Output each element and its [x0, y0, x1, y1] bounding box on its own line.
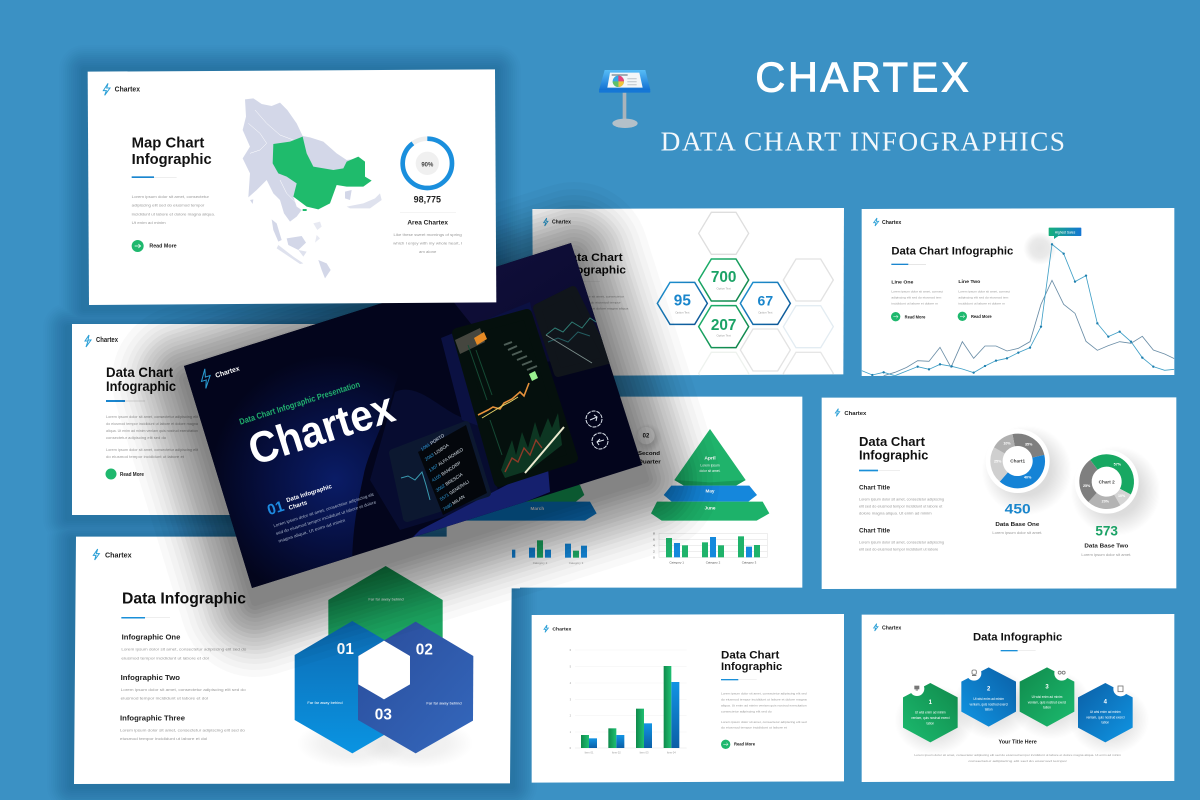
text: infographic one: Lorem ipsum dolor sit amet, consectetur adipiscing elit sed do — [121, 647, 247, 652]
hexagon 2: 2 — [987, 686, 991, 692]
logo: four hexagon slide — [874, 624, 901, 631]
hexagon 4: 4 — [1104, 699, 1108, 705]
body text: consectetur adipiscing elit sed do eiusmod tempor — [968, 759, 1067, 763]
stat: data base one — [992, 501, 1042, 535]
read more button: Read More — [149, 244, 177, 250]
logo: hexagon venn slide: Chartex — [105, 552, 132, 559]
hexagon: navy 02 — [358, 622, 473, 753]
heading: data chart infographic: Infographic — [721, 661, 782, 673]
labels: hexagon numbers and captions: Far far away behind — [426, 701, 462, 706]
text: infographic two: Infographic Two — [121, 673, 181, 682]
logo: left slide — [85, 335, 118, 347]
bar chart: 0 — [570, 746, 572, 750]
heading: data chart infographic — [106, 364, 176, 394]
slide: tilted dark cover — [170, 240, 642, 600]
hexagon: 95 — [657, 282, 707, 324]
body text: Lorem ipsum dolor sit amet, consectetur — [562, 294, 624, 298]
donut chart 1: 35% — [1025, 442, 1033, 446]
heading underline — [859, 470, 900, 471]
heading underline — [721, 679, 757, 680]
stat: data base two: Data Base Two — [1084, 543, 1129, 549]
hexagon 1: veniam, quis nostrud exerci — [911, 716, 950, 720]
icon: keynote — [599, 70, 650, 128]
hexagon 3 — [1011, 666, 1091, 739]
donut chart: 90%: 90% — [421, 162, 434, 168]
left bar chart: Category 3 — [569, 561, 584, 565]
text: infographic two: Lorem ipsum dolor sit amet, consectetur adipiscing elit sed do — [121, 687, 247, 692]
heading: data chart infographic: Data Chart — [721, 650, 780, 662]
button: next arrow — [586, 411, 602, 427]
button: previous arrow — [592, 433, 608, 449]
heading underline — [891, 264, 926, 265]
labels: hexagon numbers and captions: Far far away behind — [307, 700, 343, 705]
hexagon 4 — [1069, 682, 1149, 755]
label: second quarter: 02 — [643, 434, 650, 440]
column: line one — [891, 279, 943, 321]
right bar chart: 2 — [653, 550, 655, 554]
hexagon 1: Ut wisi enim ad minim — [915, 711, 946, 715]
stat: data base one: Data Base One — [995, 522, 1039, 528]
photo: bottom left phone: 4105 BANCORP — [431, 460, 462, 483]
right pyramid — [651, 429, 769, 521]
body text: do eiusmod tempor incididunt ut labore et — [106, 454, 185, 459]
right bar chart: 4 — [653, 544, 655, 548]
hexagon 3: 3 — [1045, 684, 1049, 690]
text: chart title one: dolore magna aliqua. Ut enim ad minim — [859, 511, 932, 515]
dark slide cast shadow — [187, 257, 645, 602]
photo: bottom left phone — [393, 425, 487, 518]
bar chart: Item 03 — [640, 751, 649, 755]
area chartex text block: am alone — [419, 250, 436, 254]
logo: hexagon slide — [544, 218, 571, 226]
slide: four hexagons — [862, 614, 1174, 782]
labels: hexagon numbers and captions: Far far away behind — [368, 597, 404, 602]
cover text — [200, 366, 397, 542]
right bar chart: 0 — [653, 556, 655, 560]
heading: map chart infographic — [132, 134, 212, 168]
read more button — [106, 468, 144, 480]
body text: aliqua. Ut enim ad minim veniam quis nostrud exercitation — [721, 703, 807, 707]
heading: map chart infographic: Infographic — [132, 151, 212, 168]
column: line one: adipiscing elit sed do eiusmod tem — [891, 297, 941, 300]
label: second quarter: Second — [638, 451, 661, 457]
slide: bar chart — [532, 614, 844, 783]
text: infographic three: eiusmod tempor incididunt ut labore et dol — [120, 736, 207, 741]
donut chart 1: 40% — [1024, 476, 1032, 480]
column: line one: incididunt ut labore et dolore m — [891, 303, 938, 306]
right bar chart — [653, 532, 767, 564]
photo: top right phone — [537, 290, 608, 373]
heading: data chart infographic: Infographic — [562, 264, 626, 276]
column: line one: Read More — [905, 314, 926, 319]
hexagon 1 — [894, 681, 974, 755]
bar chart: Item 01 — [585, 751, 594, 755]
text: chart title two — [859, 529, 944, 552]
text: chart title one — [859, 485, 944, 515]
read more button — [132, 240, 177, 252]
stat: data base two: Lorem ipsum dolor sit amet. — [1081, 553, 1131, 557]
logo: bar chart slide: Chartex — [552, 627, 572, 633]
logo: donut slide: Chartex — [844, 411, 867, 417]
text: infographic one — [121, 633, 247, 660]
logo: map slide — [103, 83, 140, 95]
hexagon 3: tation — [1043, 706, 1051, 710]
body text — [106, 414, 199, 459]
donut chart 2 — [1071, 446, 1161, 536]
donut chart: 90% — [403, 139, 452, 188]
hexagon: 67: Option Text — [758, 310, 773, 314]
labels: hexagon numbers and captions: 02 — [416, 641, 433, 658]
area chartex text block: Area Chartex — [407, 221, 449, 227]
hexagon 3: Ut wisi enim ad minim — [1032, 695, 1063, 699]
heading: data chart infographic: Infographic — [859, 449, 928, 463]
hexagon: 207 — [699, 306, 749, 348]
line chart — [862, 232, 1174, 376]
hexagon: 207: Option Text — [717, 333, 731, 337]
donut chart 1: 10% — [1003, 442, 1011, 446]
bar chart: 6 — [570, 648, 572, 652]
donut chart 2: 20% — [1102, 499, 1110, 503]
header: title block — [599, 55, 1065, 157]
left bar chart — [512, 540, 587, 565]
right bar chart: Category 3 — [742, 560, 757, 564]
text: infographic two: eiusmod tempor incididunt ut labore et dol — [121, 696, 208, 701]
hexagon diagram — [295, 566, 473, 768]
slide shadows on background — [68, 70, 512, 786]
column: line two: Read More — [971, 314, 992, 319]
cover body text — [273, 492, 380, 544]
text: infographic one: Infographic One — [122, 633, 180, 642]
body text: Lorem ipsum dolor sit amet, consectetur adipiscing elit sed — [721, 691, 807, 695]
heading underline — [106, 400, 145, 402]
cover artwork — [170, 240, 620, 600]
body text — [562, 282, 629, 311]
read more button — [721, 740, 756, 749]
cover body text: Lorem ipsum dolor sit amet, consectetur adipiscing elit — [273, 492, 375, 528]
hexagon: 67 — [740, 282, 790, 324]
photo: bottom left phone: 2083 LISBOA — [424, 443, 450, 462]
body text: incididunt ut labore et dolore magna aliqua. — [132, 212, 215, 216]
slide: pyramid charts — [447, 397, 802, 588]
tagline: Data Chart Infographic Presentation — [238, 379, 361, 427]
right pyramid: dolor sit amet. — [700, 469, 721, 473]
left bar chart: Category 2 — [533, 561, 548, 565]
title: chartex: Chartex — [243, 383, 401, 475]
body text: do eiusmod tempor incididunt ut labore et dolore magna — [106, 421, 199, 426]
text: chart title one: Chart Title — [859, 485, 891, 491]
body text: Ut enim ad minim — [132, 221, 166, 225]
labels: hexagon numbers and captions: 03 — [375, 706, 392, 723]
hexagon 2: Ut wisi enim ad minim — [973, 697, 1004, 701]
slide: donut charts — [822, 397, 1176, 589]
hexagon 4: veniam, quis nostrud exerci — [1086, 715, 1125, 719]
number: 01: 01 — [265, 498, 286, 519]
text: infographic two — [121, 673, 247, 701]
body text — [721, 691, 807, 729]
hexagon: white centre — [358, 641, 410, 699]
heading: data chart infographic: Infographic — [106, 378, 176, 394]
heading: data chart infographic — [562, 252, 626, 276]
heading: data chart infographic: Data Chart — [562, 252, 623, 264]
text: chart title two: elit sed do eiusmod tempor incididunt ut labore — [859, 548, 938, 552]
logo: four hexagon slide: Chartex — [882, 625, 901, 631]
left pyramid — [460, 485, 597, 521]
bar chart: 1 — [570, 730, 572, 734]
column: line two: incididunt ut labore et dolore m — [958, 303, 1005, 306]
area chartex text block — [393, 212, 462, 254]
labels: hexagon numbers and captions — [307, 597, 462, 723]
subtitle: your title here: Your Title Here — [998, 739, 1037, 745]
photo: main trading chart — [455, 314, 573, 482]
logo: bar chart slide — [544, 625, 572, 633]
bar chart: 5 — [570, 665, 572, 669]
text: infographic three: Infographic Three — [120, 714, 185, 723]
right bar chart: 8 — [653, 532, 655, 536]
bar chart — [570, 648, 687, 755]
faded hexagons — [699, 212, 833, 394]
logo: cover — [200, 366, 240, 389]
cover body text: sed do eiusmod tempor incididunt ut labore et dolore — [275, 499, 377, 536]
text: chart title one: elit sed do eiusmod tempor incididunt ut labore et — [859, 504, 942, 508]
body text: Lorem ipsum dolor sit amet, consectetur — [132, 195, 210, 199]
right pyramid: June — [705, 506, 716, 511]
logo: donut slide — [835, 409, 867, 417]
area chartex text block: Like these sweet mornings of spring — [393, 233, 462, 237]
hexagon: green top — [328, 566, 443, 697]
right bar chart: Category 2 — [706, 560, 721, 564]
body text: do eiusmod tempor incididunt ut labore et dolore magna — [721, 697, 807, 701]
donut chart 2: 57% — [1114, 462, 1122, 466]
heading: data chart infographic: Data Chart — [106, 364, 173, 380]
body text: do eiusmod tempor incididunt ut labore et — [721, 725, 787, 729]
column: line two: Line Two — [958, 279, 980, 285]
heading underline — [132, 176, 177, 178]
left pyramid: March — [530, 506, 544, 511]
callout: highest sales: Highest Sales — [1055, 230, 1076, 234]
text: infographic three: Lorem ipsum dolor sit amet, consectetur adipiscing elit sed do — [120, 727, 246, 732]
hexagon: 700: 700 — [711, 269, 736, 286]
logo: hexagon venn slide — [93, 549, 132, 560]
logo: line chart slide — [874, 218, 901, 226]
right bar chart: 6 — [653, 538, 655, 542]
column: line two: Lorem ipsum dolor sit amet, consect — [958, 291, 1010, 294]
slide: data infographic three hexagons — [74, 537, 520, 784]
heading underline — [121, 617, 170, 618]
hexagon: 700: Option Text — [717, 287, 731, 291]
hexagon 2 — [953, 666, 1033, 739]
stat: data base one: Lorem ipsum dolor sit amet. — [992, 531, 1042, 535]
right bar chart: Category 1 — [669, 560, 684, 564]
column: line one: Line One — [891, 279, 914, 285]
body text: Lorem ipsum dolor sit amet, consectetur adipiscing elit sed do eiusmod tempor incididunt ut labore et dolore magna aliqua. Ut enim ad minim — [914, 753, 1122, 757]
logo: line chart slide: Chartex — [882, 220, 901, 226]
body text: incididunt ut labore et dolore magna aliqua — [562, 307, 629, 311]
column: line two: adipiscing elit sed do eiusmod tem — [958, 297, 1008, 300]
hexagon: 95: 95 — [674, 292, 691, 309]
donut chart 1: Chart1 — [1010, 458, 1025, 463]
hexagon 3: veniam, quis nostrud exerci — [1028, 700, 1067, 704]
heading: data chart infographic: Data Chart — [859, 435, 926, 449]
photo: bottom left phone: 5571 GENERALI — [439, 479, 470, 502]
hexagon 4: tation — [1101, 721, 1109, 725]
area chartex text block: which I enjoy with my whole heart, I — [393, 241, 462, 245]
logo: left slide: Chartex — [96, 337, 118, 344]
hexagon: 700 — [699, 259, 749, 301]
callout: highest sales — [1049, 228, 1081, 239]
read more button: Read More — [734, 742, 756, 747]
logo: cover: Chartex — [215, 366, 241, 380]
subtitle: data chart infographics: DATA CHART INFOGRAPHICS — [661, 127, 1065, 157]
hexagon: 207: 207 — [711, 317, 736, 334]
hexagon: 67: 67 — [758, 292, 773, 308]
stat: data base two — [1081, 522, 1131, 557]
heading underline — [1001, 650, 1036, 651]
stat: data base one: 450 — [1005, 501, 1031, 517]
heading: map chart infographic: Map Chart — [132, 134, 204, 151]
donut chart 2: Chart 2 — [1099, 480, 1115, 485]
text: infographic one: eiusmod tempor incididunt ut labore et dol — [121, 655, 209, 660]
label: second quarter — [634, 424, 662, 465]
heading: data infographic: Data Infographic — [973, 632, 1062, 644]
labels: hexagon numbers and captions: 01 — [337, 641, 354, 658]
body text: adipiscing elit sed do eiusmod tempor — [132, 204, 205, 208]
photo: bottom left phone: 7480 MILAN — [442, 494, 466, 512]
stat: data base two: 573 — [1095, 522, 1118, 538]
hexagon 2: veniam, quis nostrud exerci — [969, 702, 1008, 706]
hexagon 1: tation — [926, 721, 934, 725]
body text: adipiscing elit sed do eiusmod tempor — [562, 300, 621, 304]
cover body text: magna aliqua. Ut enim ad minim — [278, 517, 346, 544]
heading: data chart infographic — [859, 435, 928, 463]
logo: hexagon slide: Chartex — [552, 220, 571, 226]
donut chart 1 — [982, 425, 1072, 515]
body text: aliqua. Ut enim ad minim veniam quis nostrud exercitation — [106, 428, 198, 433]
bar chart: 3 — [570, 697, 572, 701]
photo: bottom left phone: 1307 ALFA ROMEO — [428, 447, 465, 473]
title: chartex: CHARTEX — [755, 55, 969, 101]
stat: 98,775: 98,775 — [414, 195, 441, 205]
body text — [132, 195, 215, 225]
body text: Lorem ipsum dolor sit amet, consectetur adipiscing elit sed — [721, 720, 807, 724]
hexagon 1: 1 — [929, 700, 933, 706]
hexagon: blue 01 — [295, 621, 410, 753]
heading: data chart infographic — [721, 650, 782, 673]
body text: Lorem ipsum dolor sit amet, consectetur adipiscing elit — [106, 447, 199, 452]
heading: data infographic: Data Infographic — [122, 590, 246, 607]
text: chart title one: Lorem ipsum dolor sit amet, consectetur adipiscing — [859, 497, 944, 501]
logo: map slide: Chartex — [115, 87, 140, 94]
donut chart 2: 10% — [1118, 494, 1126, 498]
slide: line chart — [862, 208, 1174, 376]
section label: Data Infographic — [286, 484, 333, 504]
column: line two — [958, 279, 1010, 321]
body text: consectetur adipiscing elit sed do — [106, 435, 167, 440]
map — [243, 98, 382, 278]
hexagon 4: Ut wisi enim ad minim — [1090, 710, 1121, 714]
body text — [914, 753, 1122, 763]
column: line one: Lorem ipsum dolor sit amet, consect — [891, 291, 943, 294]
bar chart: Item 02 — [612, 751, 621, 755]
text: chart title two: Chart Title — [859, 529, 891, 535]
slide: map chart — [88, 69, 496, 305]
photo: bottom left phone: 1091 PORTO — [420, 433, 446, 452]
photo: bottom left phone: 3062 BRESCIA — [435, 472, 464, 493]
read more button: Read More — [120, 472, 144, 478]
text: infographic three — [120, 714, 246, 741]
slide: left data chart — [72, 324, 472, 515]
bar chart: 2 — [570, 714, 572, 718]
right pyramid: Lorem ipsum — [700, 464, 720, 468]
right pyramid: May — [705, 488, 715, 493]
bar chart: 4 — [570, 681, 572, 685]
donut chart 2: 25% — [1083, 484, 1091, 488]
body text: consectetur adipiscing elit sed do — [721, 710, 772, 714]
heading: data chart infographic: Data Chart Infographic — [891, 245, 1013, 257]
body text: Lorem ipsum dolor sit amet, consectetur adipiscing elit — [106, 414, 199, 419]
right pyramid: April — [704, 455, 716, 461]
bar chart: Item 04 — [667, 751, 676, 755]
label: second quarter: Quarter — [638, 459, 662, 465]
hexagon: 95: Option Text — [675, 310, 690, 314]
section label: Charts — [288, 500, 309, 512]
hexagon 2: tation — [985, 708, 993, 712]
donut chart 1: 25% — [994, 459, 1002, 463]
slide: hexagon data chart — [532, 208, 844, 394]
text: chart title two: Lorem ipsum dolor sit amet, consectetur adipiscing — [859, 541, 944, 545]
